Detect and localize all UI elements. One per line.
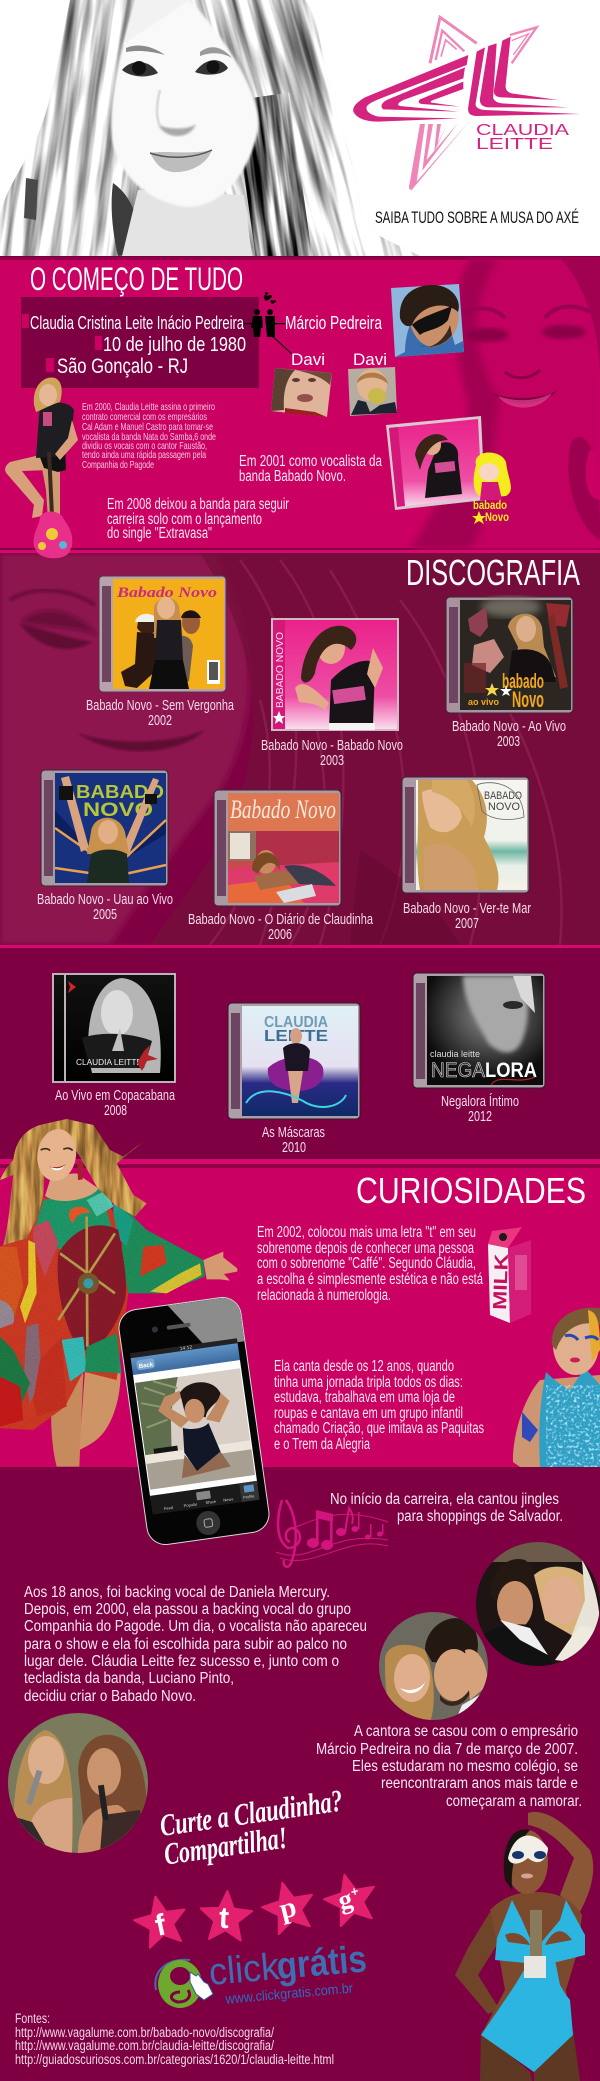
raised arm — [528, 1812, 593, 1915]
icon: google plus star: g — [335, 1883, 356, 1916]
personal data box: São Gonçalo - RJ — [57, 355, 188, 378]
figure: iPhone with childhood photo: News — [223, 1496, 234, 1503]
text: 2008: do single "Extravasa" — [107, 525, 212, 542]
portrait illustration — [0, 0, 420, 256]
face — [39, 384, 57, 406]
text: 2000 — [82, 401, 216, 471]
icon: google plus star: + — [349, 1883, 360, 1900]
caption: Babado Novo - Ver-te Mar — [403, 900, 531, 917]
album: Sem Vergonha: Babado Novo — [116, 585, 217, 601]
icon: facebook star: f — [152, 1908, 170, 1943]
icon: pinterest star — [258, 1877, 319, 1936]
left brow — [126, 46, 165, 55]
icon: facebook star — [130, 1891, 191, 1950]
photo: Davi 2 — [348, 367, 397, 416]
hair — [0, 1119, 147, 1245]
text: 2001: Em 2001 como vocalista da — [239, 453, 382, 470]
logo: clickgrátis: grátis — [275, 1938, 368, 1988]
figure: iPhone with childhood photo: Profile — [243, 1493, 255, 1500]
caption: 2002 — [148, 712, 172, 729]
caption: 2010 — [282, 1139, 306, 1156]
text: sobrenome: sobrenome depois de conhecer uma pessoa — [257, 1240, 474, 1257]
photo: Márcio — [391, 284, 464, 357]
album: Babado Novo: BABADO NOVO — [275, 632, 286, 708]
album: Negalora Íntimo: NEGA — [431, 1059, 485, 1082]
panel: curiosidades continued — [8, 1295, 600, 2081]
logo: clickgrátis — [155, 1938, 370, 2008]
right brow — [200, 47, 232, 58]
album: Uau ao Vivo — [41, 770, 168, 886]
personal data box — [21, 297, 259, 388]
album: Uau ao Vivo: NOVO — [83, 800, 153, 821]
call to action: Curte a Claudinha? — [158, 1783, 345, 1843]
text: desde os 12 anos: chamado Criação, que imitava as Paquitas — [274, 1420, 484, 1437]
legs — [51, 1373, 83, 1467]
hand — [203, 1252, 237, 1281]
caption: Babado Novo - Sem Vergonha — [86, 697, 234, 714]
logo name — [476, 122, 569, 153]
text: 2000: Em 2000, Claudia Leitte assina o primeiro — [82, 401, 215, 413]
figure: Claudia in sequined dress — [0, 1113, 237, 1467]
left eye — [122, 62, 158, 76]
text: Aos 18 anos: para o show e ela foi escolhida para subir ao palco no — [24, 1636, 347, 1653]
figure: Claudia with guitar — [5, 377, 78, 556]
text: Aos 18 anos: decidiu criar o Babado Novo. — [24, 1688, 196, 1705]
hair — [34, 377, 62, 412]
figure: iPhone with childhood photo: Back — [139, 1362, 154, 1370]
torso — [481, 1892, 582, 2035]
icon: milk carton — [488, 1227, 531, 1323]
text: Aos 18 anos — [24, 1584, 367, 1705]
torso — [36, 403, 74, 458]
text: 2008: Em 2008 deixou a banda para seguir — [107, 496, 289, 513]
album: As Máscaras: LEITTE — [264, 1028, 328, 1045]
text: desde os 12 anos: roupas e cantava em um grupo infantil — [274, 1405, 463, 1422]
caption: 2007 — [455, 915, 479, 932]
caption: 2006 — [268, 926, 292, 943]
call to action: Compartilha! — [162, 1820, 289, 1872]
sources — [15, 2011, 334, 2067]
album thumbnail — [386, 416, 485, 510]
icon: tumblr star: t — [218, 1902, 230, 1935]
album: As Máscaras: CLAUDIA — [264, 1014, 328, 1031]
text: jingles: No início da carreira, ela cantou jingles — [330, 1491, 559, 1508]
raised leg — [5, 455, 50, 518]
icon: tumblr star — [199, 1890, 253, 1941]
text: 2000: dividiu os vocais com o cantor Faustão, — [82, 440, 207, 452]
sources: http://www.vagalume.com.br/babado-novo/discografia/ — [15, 2025, 274, 2040]
album: O Diário de Claudinha: Babado Novo — [230, 795, 336, 824]
photo: Davi 1 — [271, 368, 332, 417]
text: Aos 18 anos: lugar dele. Cláudia Leitte fez sucesso e, junto com o — [24, 1653, 339, 1670]
panel: curiosidades — [0, 1113, 600, 1467]
right eye — [195, 60, 228, 75]
text: 2000: vocalista da banda Nata do Samba,6 onde — [82, 431, 216, 443]
text: 2000: Cal Adam e Manuel Castro para tornar-se — [82, 421, 213, 433]
standing leg — [42, 468, 60, 520]
sleeve right — [120, 1207, 205, 1293]
guitar base overlap — [36, 550, 70, 558]
caption: 2008 — [104, 1102, 127, 1119]
icon: pinterest star: p — [276, 1891, 300, 1926]
album: Negalora Íntimo: claudia leitte — [430, 1049, 480, 1059]
caption: As Máscaras — [262, 1124, 325, 1141]
shorts — [38, 450, 66, 472]
caption: Negalora Íntimo — [441, 1093, 519, 1110]
text: jingles — [330, 1491, 563, 1525]
caption: Babado Novo - Uau ao Vivo — [37, 891, 173, 908]
figure: iPhone with childhood photo: Share — [205, 1499, 217, 1505]
text: 2000: Companhia do Pagode — [82, 459, 154, 471]
text: desde os 12 anos: Ela canta desde os 12 anos, quando — [274, 1358, 454, 1375]
album: Sem Vergonha — [99, 576, 226, 692]
logo name: CLAUDIA — [476, 122, 569, 139]
panel: header — [0, 0, 600, 256]
album: Ao Vivo em Copacabana — [52, 973, 176, 1083]
figure: iPhone with childhood photo: Feed — [164, 1505, 173, 1511]
children names — [291, 350, 387, 369]
personal data box: 10 de julho de 1980 — [103, 334, 246, 356]
text: sobrenome: Em 2002, colocou mais uma letra "t" em seu — [257, 1224, 476, 1241]
sources: Fontes: — [15, 2011, 50, 2026]
swimsuit — [495, 1900, 585, 1965]
album: Negalora Íntimo: LORA — [485, 1059, 537, 1082]
text: jingles: para shoppings de Salvador. — [397, 1508, 563, 1525]
album: Ver-te Mar — [402, 777, 529, 893]
album: Ao Vivo: ao vivo — [468, 697, 500, 707]
text: 2001 — [239, 453, 382, 485]
caption: 2003 — [320, 752, 344, 769]
icon: Babado Novo mascot: Novo — [485, 510, 509, 524]
text: desde os 12 anos: e o Trem da Alegria — [274, 1436, 370, 1453]
dress — [0, 1187, 128, 1430]
icon: milk carton: MILK — [490, 1253, 513, 1310]
caption — [403, 900, 531, 932]
text: desde os 12 anos: estudava, trabalhava em uma loja de — [274, 1389, 455, 1406]
album: O Diário de Claudinha — [214, 790, 341, 906]
photo: couple — [379, 1612, 489, 1722]
caption: 2012 — [468, 1108, 492, 1125]
icon: couple and hearts — [244, 292, 292, 354]
caption — [37, 891, 173, 923]
text: 2001: banda Babado Novo. — [239, 468, 346, 485]
text: sobrenome: relacionada à numerologia. — [257, 1287, 391, 1304]
figure: woman in turquoise swimsuit — [455, 1812, 593, 2081]
caption: Babado Novo - O Diário de Claudinha — [188, 911, 373, 928]
caption: 2005 — [93, 906, 117, 923]
nose — [158, 124, 196, 136]
panel: discografia — [0, 550, 600, 945]
album: Ao Vivo em Copacabana: CLAUDIA LEITTE — [76, 1058, 142, 1067]
background face — [410, 258, 600, 550]
caption — [55, 1087, 175, 1119]
panel: o começo de tudo — [0, 257, 600, 556]
text: casamento — [316, 1723, 582, 1810]
figure: iPhone with childhood photo: 14:12 — [179, 1345, 193, 1352]
text: sobrenome: a escolha é simplesmente estética e não está — [257, 1271, 483, 1288]
album: Ao Vivo — [446, 597, 573, 713]
call to action — [158, 1783, 349, 1872]
lips — [150, 150, 212, 172]
text: sobrenome — [257, 1224, 483, 1304]
text: Aos 18 anos: tecladista da banda, Luciano Pinto, — [24, 1670, 234, 1687]
text: Aos 18 anos: Companhia do Pagode. Um dia, o vocalista não apareceu — [24, 1618, 367, 1635]
sources: http://guiadoscuriosos.com.br/categorias/1620/1/claudia-leitte.html — [15, 2052, 334, 2067]
head — [506, 1830, 548, 1894]
album: Negalora Íntimo — [413, 973, 545, 1088]
logo: clickgrátis: click — [207, 1946, 282, 1994]
figure: iPhone with childhood photo — [116, 1295, 272, 1547]
text: Aos 18 anos: Depois, em 2000, ela passou a backing vocal do grupo — [24, 1601, 351, 1618]
lowered arm — [455, 1912, 500, 2014]
caption: Ao Vivo em Copacabana — [55, 1087, 175, 1104]
sources: http://www.vagalume.com.br/claudia-leitte/discografia/ — [15, 2038, 274, 2053]
album: Ao Vivo: babado — [502, 671, 544, 693]
logo: clickgrátis: www.clickgratis.com.br — [224, 1980, 354, 2007]
section title: O COMEÇO DE TUDO — [30, 261, 243, 297]
background face and hair — [0, 553, 600, 945]
earring — [77, 1160, 83, 1180]
text: Aos 18 anos: Aos 18 anos, foi backing vocal de Daniela Mercury. — [24, 1584, 330, 1601]
panel: discografia solo — [52, 973, 545, 1156]
arm — [55, 420, 78, 460]
photo: wedding — [476, 1542, 600, 1666]
personal data box: Claudia Cristina Leite Inácio Pedreira — [30, 313, 245, 333]
text: 2008: carreira solo com o lançamento — [107, 511, 262, 528]
text: 2000: tendo ainda uma rápida passagem pela — [82, 449, 206, 461]
album: Ver-te Mar: NOVO — [488, 801, 520, 813]
neck and chest — [45, 1173, 98, 1201]
caption: 2003 — [497, 733, 520, 750]
guitar — [47, 452, 54, 516]
album: Uau ao Vivo: BABADO — [76, 782, 164, 802]
spouse name: Márcio Pedreira — [285, 313, 383, 333]
decorative divider — [0, 945, 600, 948]
album: Ver-te Mar: BABADO — [484, 790, 522, 802]
album: Ao Vivo: Novo — [512, 687, 544, 712]
caption — [86, 697, 234, 729]
caption — [441, 1093, 519, 1125]
logo name: LEITTE — [476, 136, 553, 153]
caption — [262, 1124, 325, 1156]
figure: iPhone with childhood photo: Popular — [183, 1501, 198, 1508]
text: desde os 12 anos — [274, 1358, 484, 1453]
face — [34, 1127, 79, 1183]
caption — [261, 737, 403, 769]
caption: Babado Novo - Babado Novo — [261, 737, 403, 754]
caption — [188, 911, 373, 943]
photo: Claudia and Daniela — [8, 1713, 148, 1853]
album: As Máscaras — [228, 1003, 360, 1119]
logo: star — [353, 17, 580, 190]
text: desde os 12 anos: tinha uma jornada tripla todos os dias: — [274, 1374, 463, 1391]
text: 2000: contrato comercial com os empresários — [82, 411, 207, 423]
children names: Davi — [353, 350, 387, 369]
icon: musical notes — [276, 1500, 388, 1567]
caption — [452, 718, 566, 750]
icon: Babado Novo mascot — [472, 453, 511, 524]
figure: woman in blue — [513, 1308, 600, 1467]
text: sobrenome: com o sobrenome "Caffé". Segundo Cláudia, — [257, 1255, 476, 1272]
legs — [480, 2030, 532, 2081]
icon: Babado Novo mascot: babado — [473, 498, 507, 512]
children names: Davi — [291, 350, 325, 369]
icon: google plus star — [320, 1869, 381, 1928]
album: Babado Novo — [271, 618, 399, 731]
text: 2008 — [107, 496, 289, 542]
